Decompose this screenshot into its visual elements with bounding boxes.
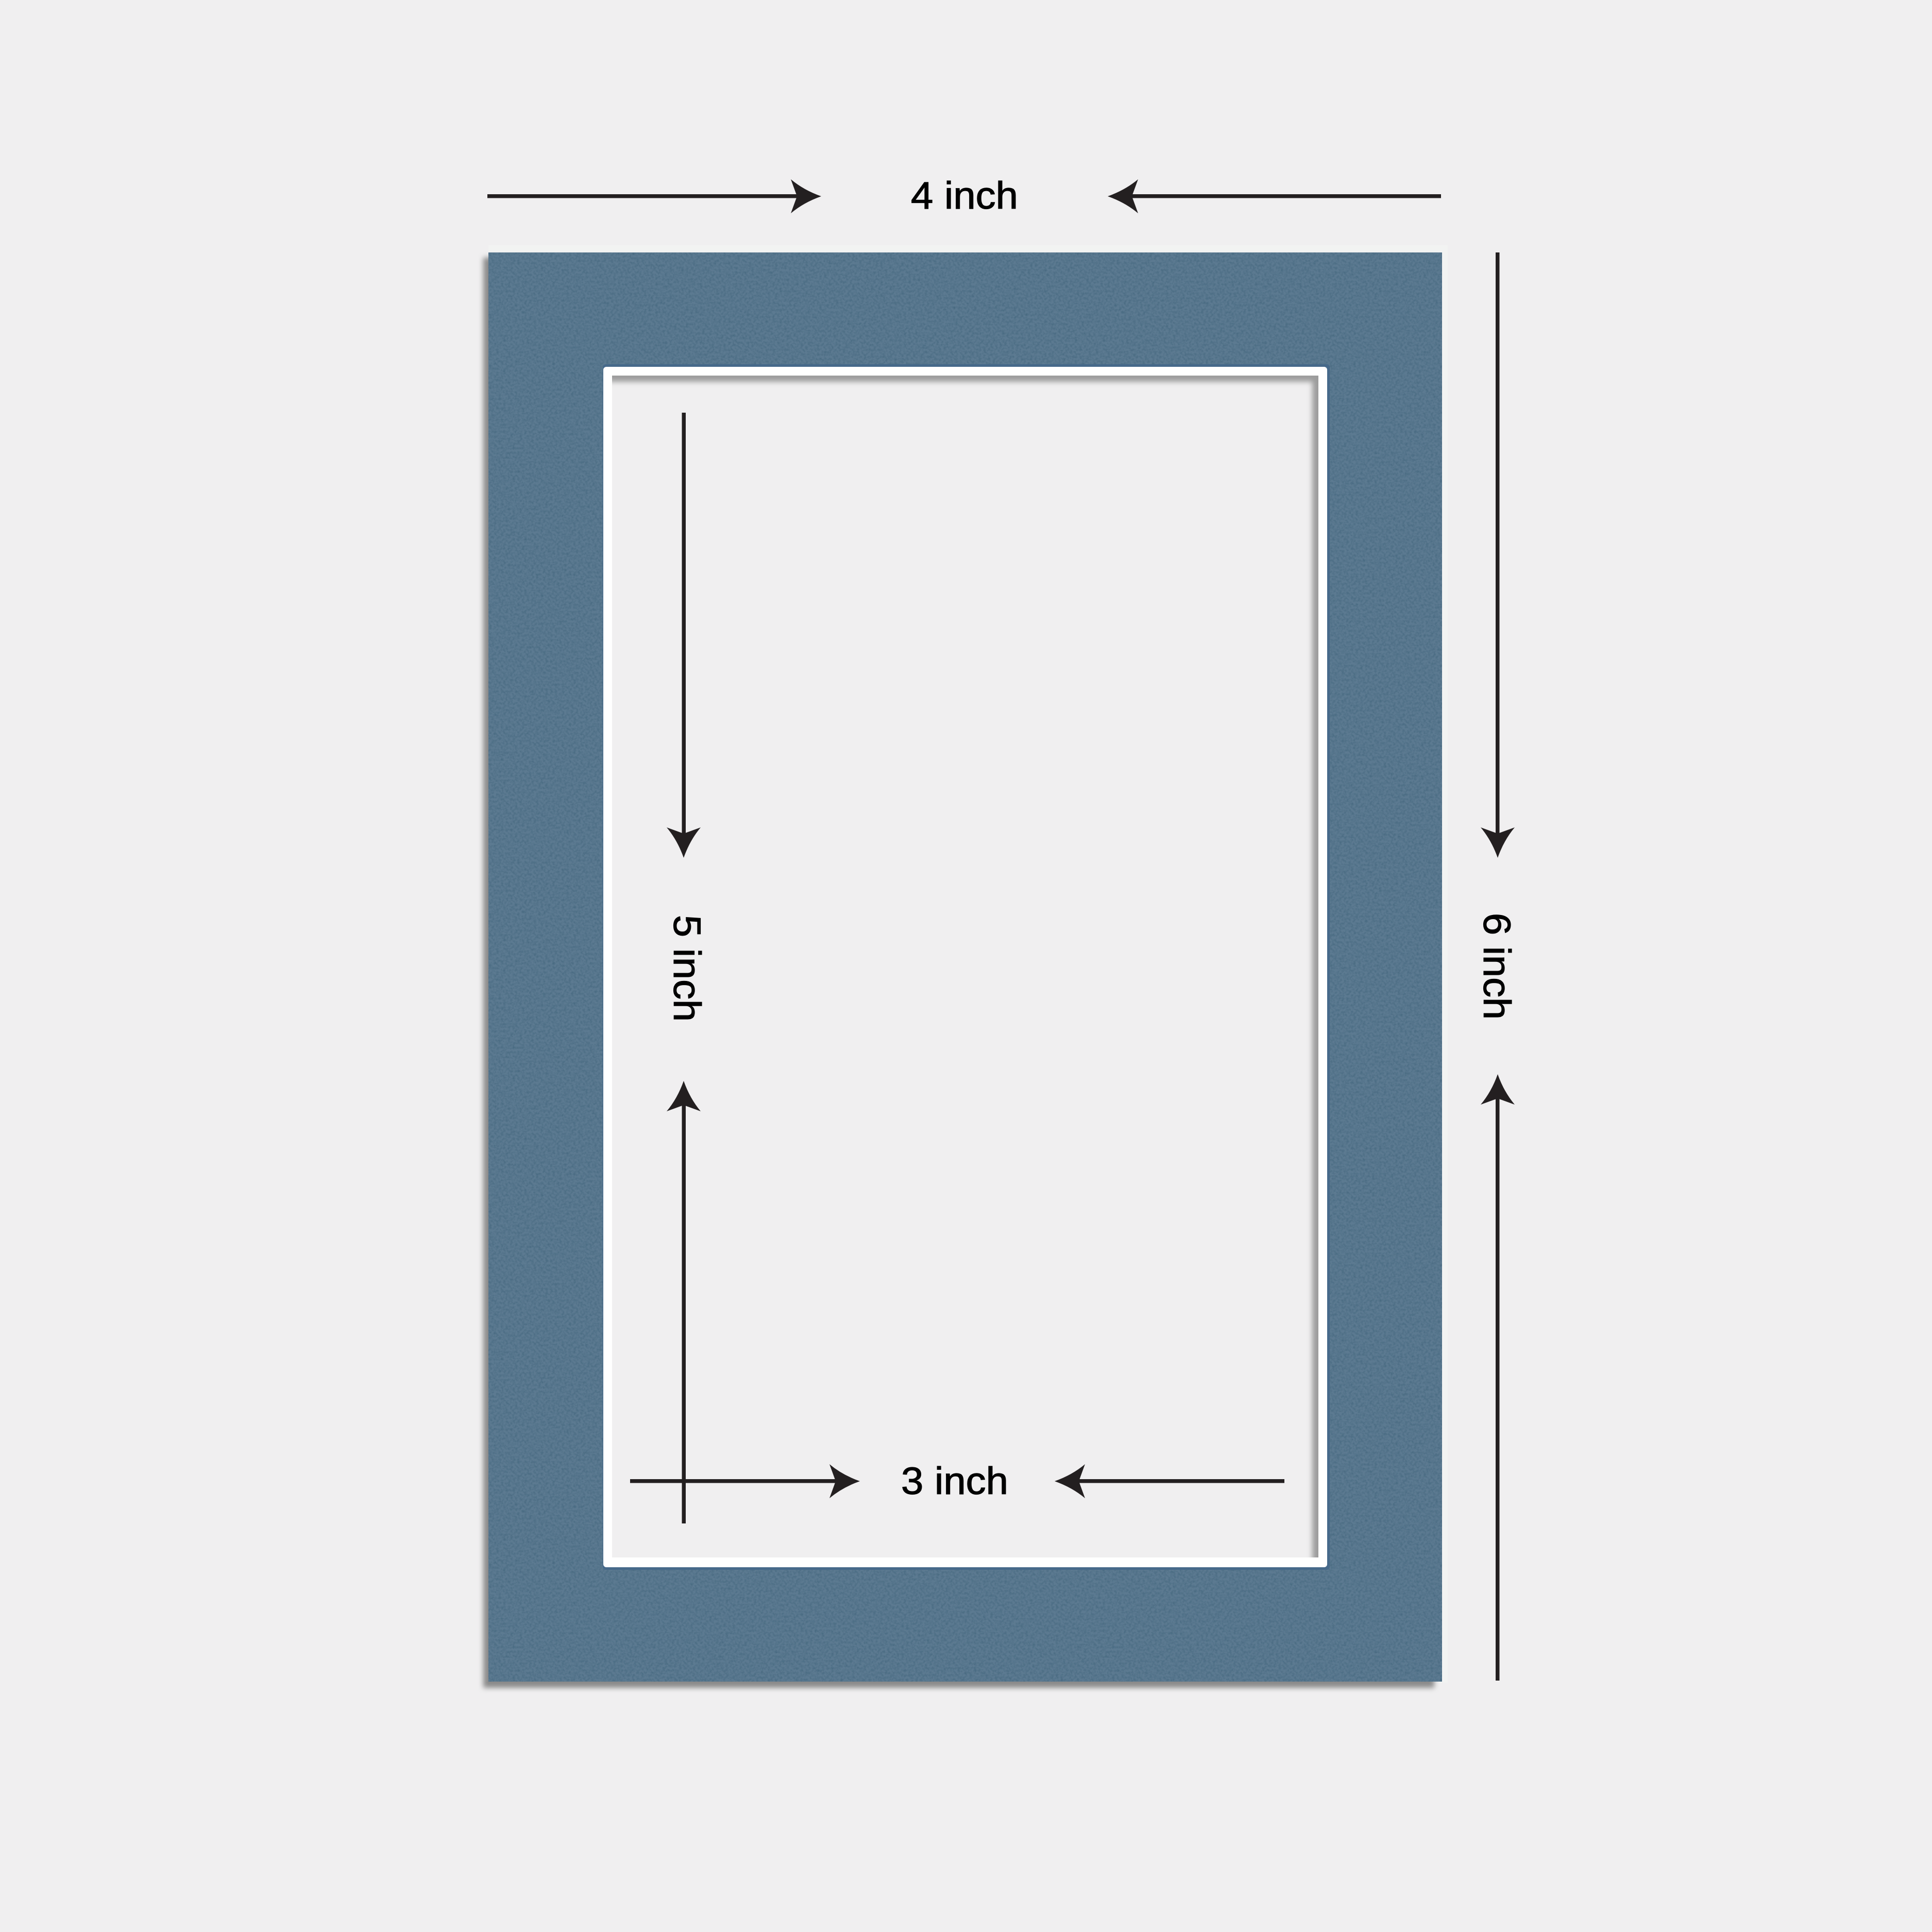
opening inner shadow	[612, 376, 1318, 1557]
infographic: mat board dimensions	[480, 179, 1515, 1691]
mat board paper grain	[488, 252, 1442, 1682]
mat board light edge glow	[488, 245, 1448, 1683]
panel: blue mat board	[483, 245, 1448, 1688]
label: 5 inch: 5 inch	[666, 915, 708, 1022]
arrow: inner height, up	[667, 1081, 701, 1523]
mat board drop shadow	[483, 258, 1434, 1688]
label: 6 inch: 6 inch	[1476, 913, 1518, 1020]
arrow: inner height, down	[667, 413, 701, 858]
mat board surface	[488, 252, 1442, 1682]
arrow: outer height, up	[1481, 1074, 1515, 1681]
arrow: inner width, left	[630, 1464, 860, 1498]
arrow: outer width, left	[487, 179, 821, 213]
arrow: outer height, down	[1481, 252, 1515, 858]
opening bevel dark edge	[603, 364, 1330, 1570]
opening interior	[612, 376, 1318, 1557]
arrow: outer width, right	[1108, 179, 1441, 213]
opening white bevel	[603, 367, 1327, 1567]
arrow: inner width, right	[1055, 1464, 1284, 1498]
label: 3 inch: 3 inch	[901, 1460, 1008, 1502]
label: 4 inch: 4 inch	[911, 174, 1018, 217]
